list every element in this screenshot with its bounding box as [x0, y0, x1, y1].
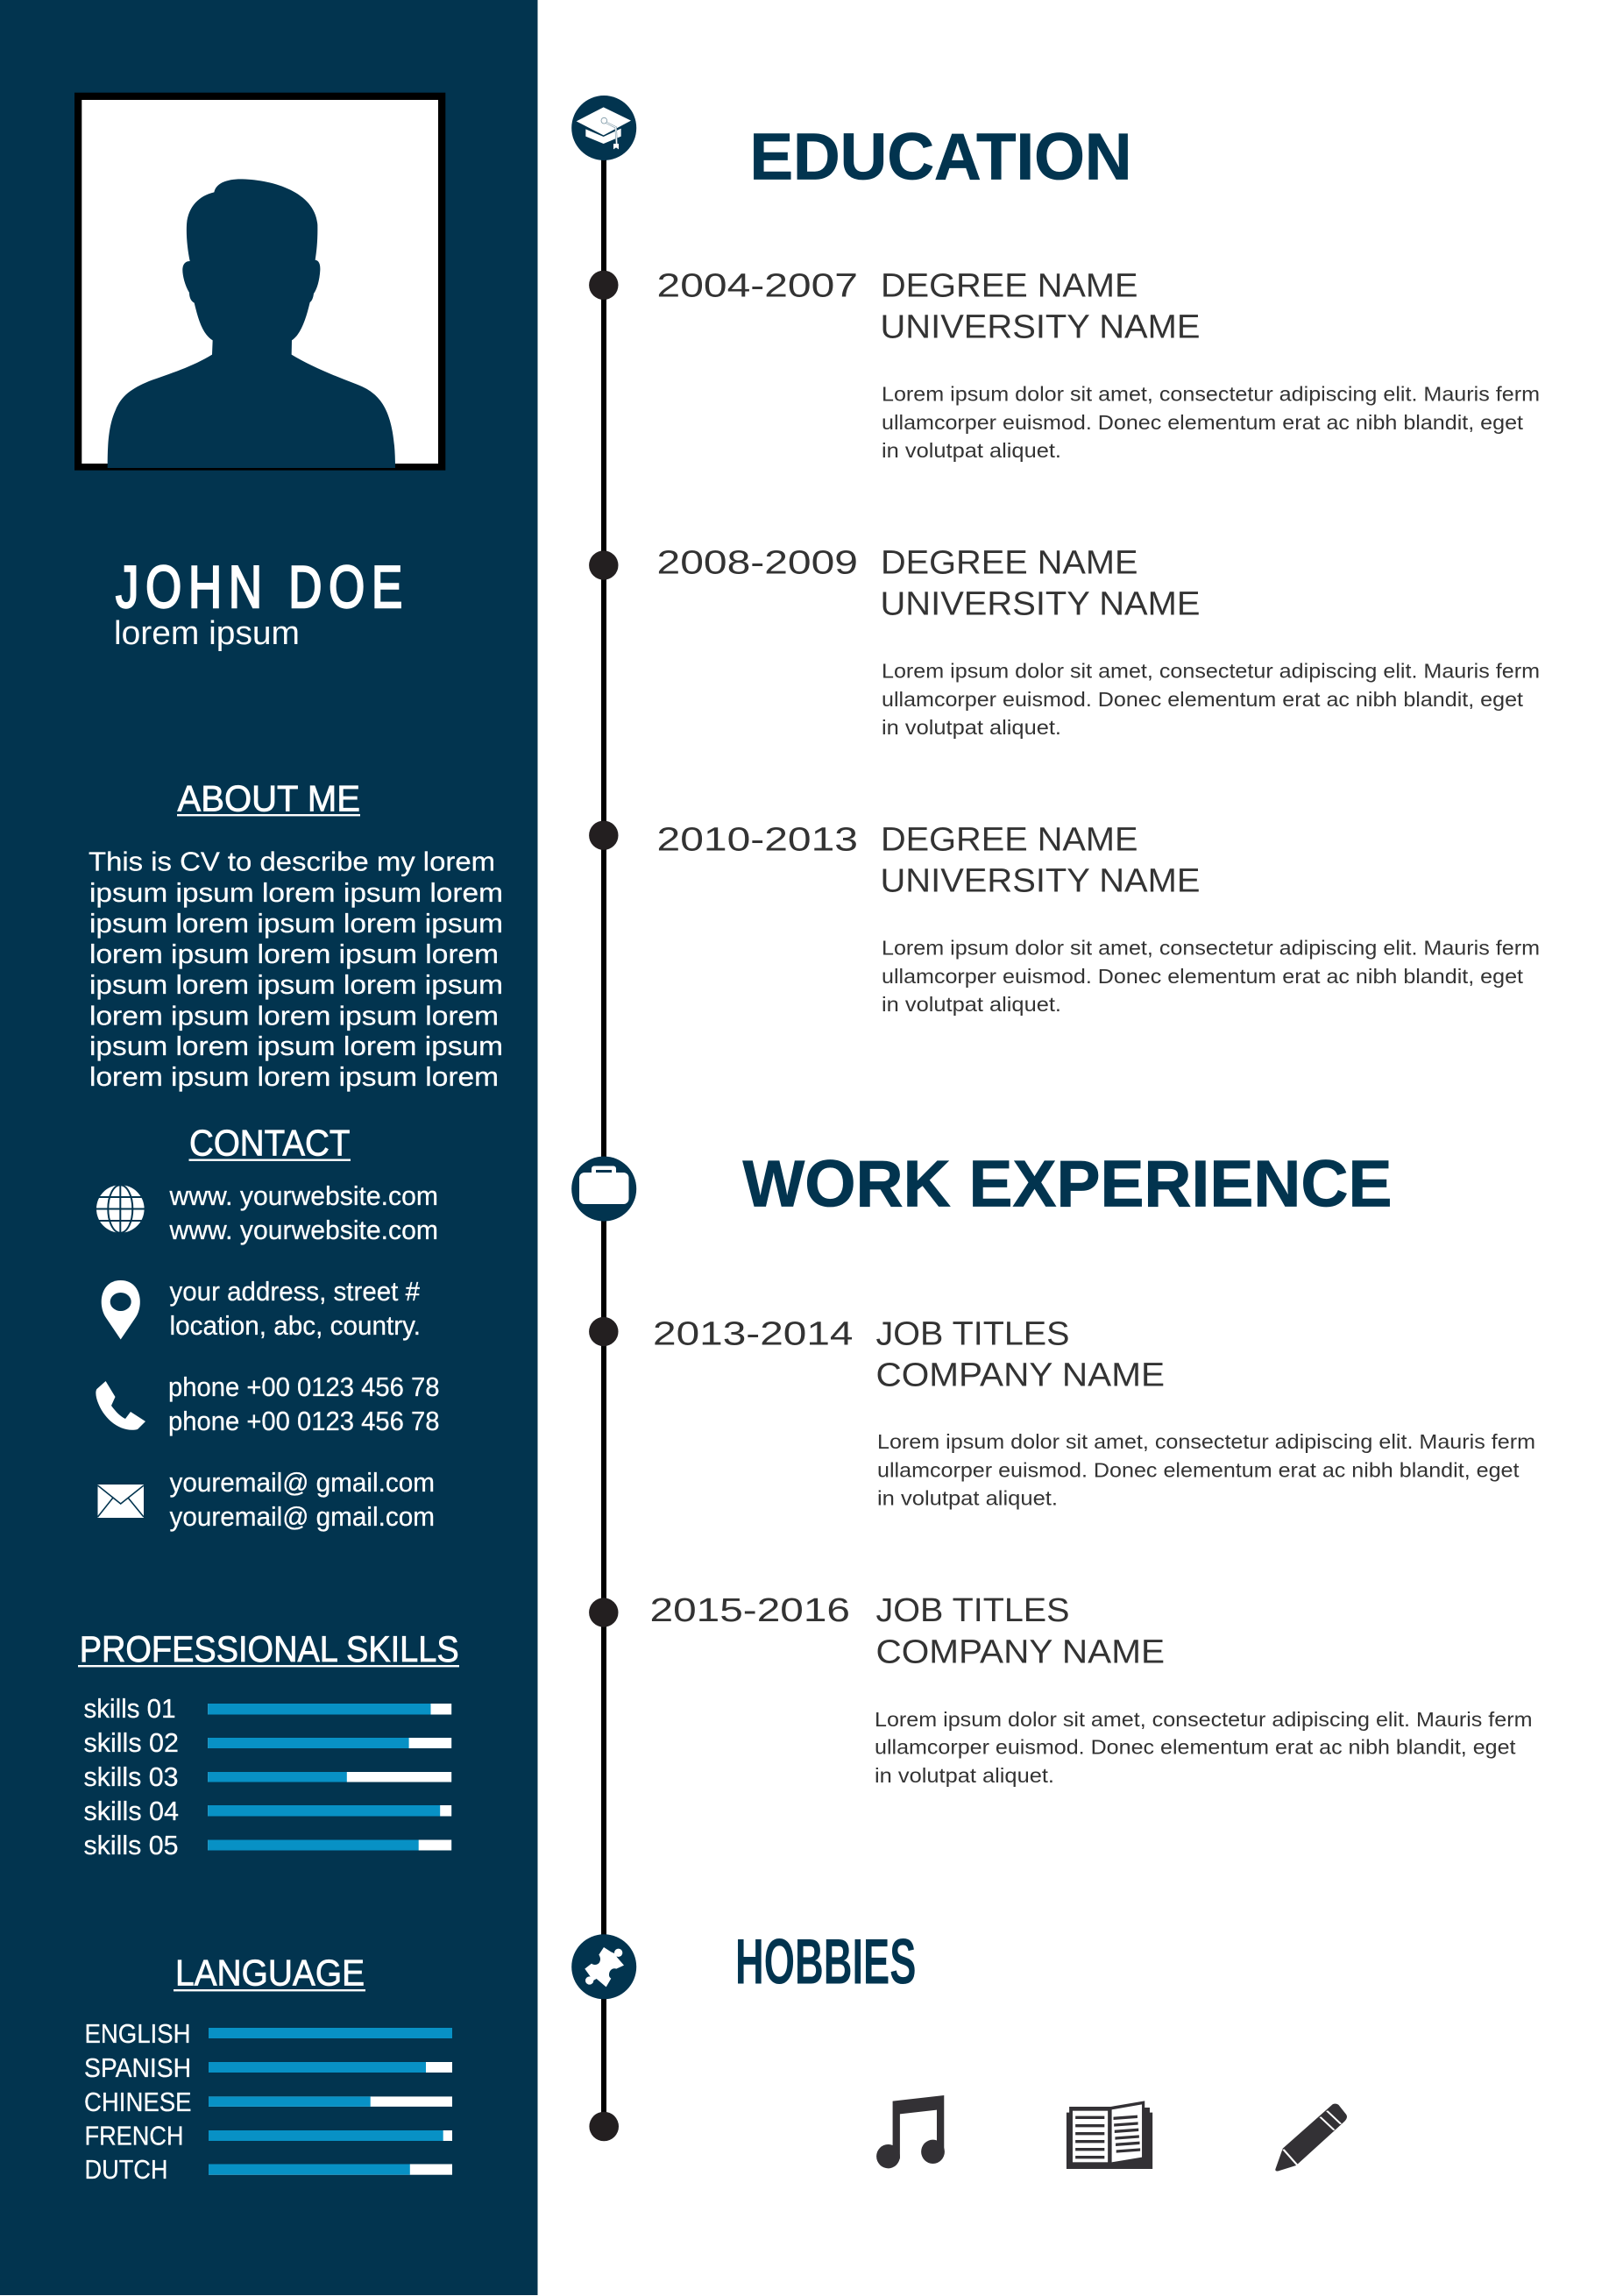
language row english: [84, 2018, 452, 2049]
phone text: [168, 1371, 440, 1436]
degree name: DEGREE NAME: [881, 545, 1138, 582]
education entry 1: [589, 268, 1540, 462]
website text: [169, 1180, 438, 1245]
skill row 05: skills 05: [84, 1830, 179, 1860]
language row french: FRENCH: [84, 2121, 184, 2151]
work entry 2: [589, 1592, 1532, 1787]
about me text: ipsum lorem ipsum lorem ipsum: [89, 908, 503, 939]
icon: graduation cap: [571, 96, 636, 160]
description: ullamcorper euismod. Donec elementum erat ac nibh blandit, eget: [875, 1736, 1516, 1759]
about me text: This is CV to describe my lorem: [89, 847, 495, 876]
description: ullamcorper euismod. Donec elementum erat ac nibh blandit, eget: [882, 411, 1523, 434]
address text: your address, street #: [170, 1276, 421, 1307]
about me text: [89, 847, 503, 1092]
skill row 05: [84, 1830, 451, 1860]
icon: envelope: [98, 1485, 144, 1518]
about me text: lorem ipsum lorem ipsum lorem: [89, 1061, 499, 1092]
skill row 01: [84, 1693, 451, 1724]
email text: [170, 1467, 435, 1532]
icon: person silhouette: [108, 179, 395, 468]
section: hobbies: [571, 1926, 1347, 2172]
icon: puzzle piece: [571, 1934, 636, 1999]
description: ullamcorper euismod. Donec elementum erat ac nibh blandit, eget: [882, 965, 1523, 988]
about me text: ipsum ipsum lorem ipsum lorem: [89, 877, 503, 908]
website text: www. yourwebsite.com: [169, 1215, 438, 1245]
about me text: lorem ipsum lorem ipsum lorem: [89, 939, 499, 969]
timeline end dot: [589, 2112, 619, 2141]
email text: youremail@ gmail.com: [170, 1467, 435, 1498]
skill row 02: skills 02: [84, 1727, 179, 1758]
university name: UNIVERSITY NAME: [880, 585, 1201, 622]
education entry 2: [589, 545, 1540, 739]
description: Lorem ipsum dolor sit amet, consectetur adipiscing elit. Mauris ferm: [882, 936, 1540, 959]
icon: pencil: [1275, 2104, 1347, 2172]
icon: map pin: [102, 1280, 140, 1339]
profile photo: [74, 93, 445, 471]
timeline dot: [589, 820, 619, 850]
description: ullamcorper euismod. Donec elementum erat ac nibh blandit, eget: [877, 1458, 1520, 1481]
language row chinese: CHINESE: [84, 2087, 191, 2117]
company name: COMPANY NAME: [876, 1633, 1165, 1670]
chart: language: [84, 2018, 452, 2185]
university name: UNIVERSITY NAME: [880, 862, 1201, 899]
job title: JOB TITLES: [876, 1592, 1069, 1629]
subtitle: lorem ipsum: [114, 615, 300, 652]
skill row 03: skills 03: [84, 1761, 179, 1792]
website text: www. yourwebsite.com: [169, 1180, 438, 1211]
dates: 2015-2016: [650, 1592, 850, 1629]
heading: contact: CONTACT: [189, 1122, 350, 1164]
language row dutch: [84, 2154, 452, 2185]
description: ullamcorper euismod. Donec elementum erat ac nibh blandit, eget: [882, 688, 1523, 711]
dates: 2010-2013: [657, 822, 858, 859]
skill row 03: [84, 1761, 451, 1792]
language row spanish: SPANISH: [84, 2052, 191, 2083]
timeline line: [601, 128, 606, 2126]
description: in volutpat aliquet.: [875, 1764, 1054, 1787]
phone text: phone +00 0123 456 78: [168, 1371, 440, 1402]
work entry 1: [589, 1316, 1535, 1510]
about me text: ipsum lorem ipsum lorem ipsum: [89, 1031, 503, 1061]
education entry 3: [589, 820, 1540, 1016]
about me text: ipsum lorem ipsum lorem ipsum: [89, 969, 503, 1000]
description: in volutpat aliquet.: [882, 716, 1061, 739]
language row french: [84, 2121, 452, 2151]
skill row 04: skills 04: [84, 1796, 179, 1826]
description: [882, 936, 1540, 1016]
description: [877, 1430, 1535, 1510]
icon: music note: [876, 2095, 945, 2168]
description: Lorem ipsum dolor sit amet, consectetur adipiscing elit. Mauris ferm: [882, 659, 1540, 682]
dates: 2004-2007: [657, 268, 858, 305]
description: in volutpat aliquet.: [882, 993, 1061, 1016]
about me text: lorem ipsum lorem ipsum lorem: [89, 1001, 499, 1031]
description: Lorem ipsum dolor sit amet, consectetur adipiscing elit. Mauris ferm: [882, 382, 1540, 405]
university name: UNIVERSITY NAME: [880, 308, 1201, 345]
email text: youremail@ gmail.com: [170, 1501, 435, 1532]
icon: open book: [1067, 2101, 1152, 2169]
company name: COMPANY NAME: [876, 1357, 1165, 1393]
icon: globe: [96, 1185, 145, 1233]
language row dutch: DUTCH: [84, 2154, 168, 2185]
dates: 2008-2009: [657, 545, 858, 582]
description: Lorem ipsum dolor sit amet, consectetur adipiscing elit. Mauris ferm: [877, 1430, 1535, 1453]
degree name: DEGREE NAME: [881, 268, 1138, 305]
description: [875, 1708, 1532, 1787]
panel: left sidebar: [0, 0, 538, 2295]
icon: phone: [96, 1381, 145, 1430]
job title: JOB TITLES: [876, 1316, 1069, 1353]
description: [882, 382, 1540, 462]
timeline dot: [589, 1317, 619, 1346]
address text: location, abc, country.: [170, 1310, 421, 1341]
description: in volutpat aliquet.: [877, 1487, 1058, 1510]
heading: about me: ABOUT ME: [177, 778, 360, 818]
icon: briefcase: [571, 1157, 636, 1222]
description: Lorem ipsum dolor sit amet, consectetur adipiscing elit. Mauris ferm: [875, 1708, 1532, 1731]
address text: [170, 1276, 421, 1341]
description: in volutpat aliquet.: [882, 439, 1061, 462]
timeline dot: [589, 550, 619, 580]
timeline dot: [589, 271, 619, 300]
heading: work experience: WORK EXPERIENCE: [743, 1146, 1392, 1220]
skill row 04: [84, 1796, 451, 1826]
heading: hobbies: HOBBIES: [735, 1926, 917, 1997]
name: JOHN DOE: [116, 554, 409, 620]
dates: 2013-2014: [653, 1316, 854, 1353]
section: education: [571, 96, 1540, 1016]
heading: education: EDUCATION: [750, 119, 1132, 193]
skill row 02: [84, 1727, 451, 1758]
timeline dot: [589, 1598, 619, 1627]
section: work experience: [571, 1146, 1535, 1787]
language row english: ENGLISH: [84, 2018, 191, 2049]
heading: professional skills: PROFESSIONAL SKILLS: [80, 1628, 459, 1669]
phone text: phone +00 0123 456 78: [168, 1406, 440, 1436]
degree name: DEGREE NAME: [881, 822, 1138, 859]
language row spanish: [84, 2052, 452, 2083]
heading: language: LANGUAGE: [175, 1952, 365, 1993]
chart: professional skills: [84, 1693, 451, 1860]
description: [882, 659, 1540, 739]
language row chinese: [84, 2087, 452, 2117]
skill row 01: skills 01: [84, 1693, 175, 1724]
